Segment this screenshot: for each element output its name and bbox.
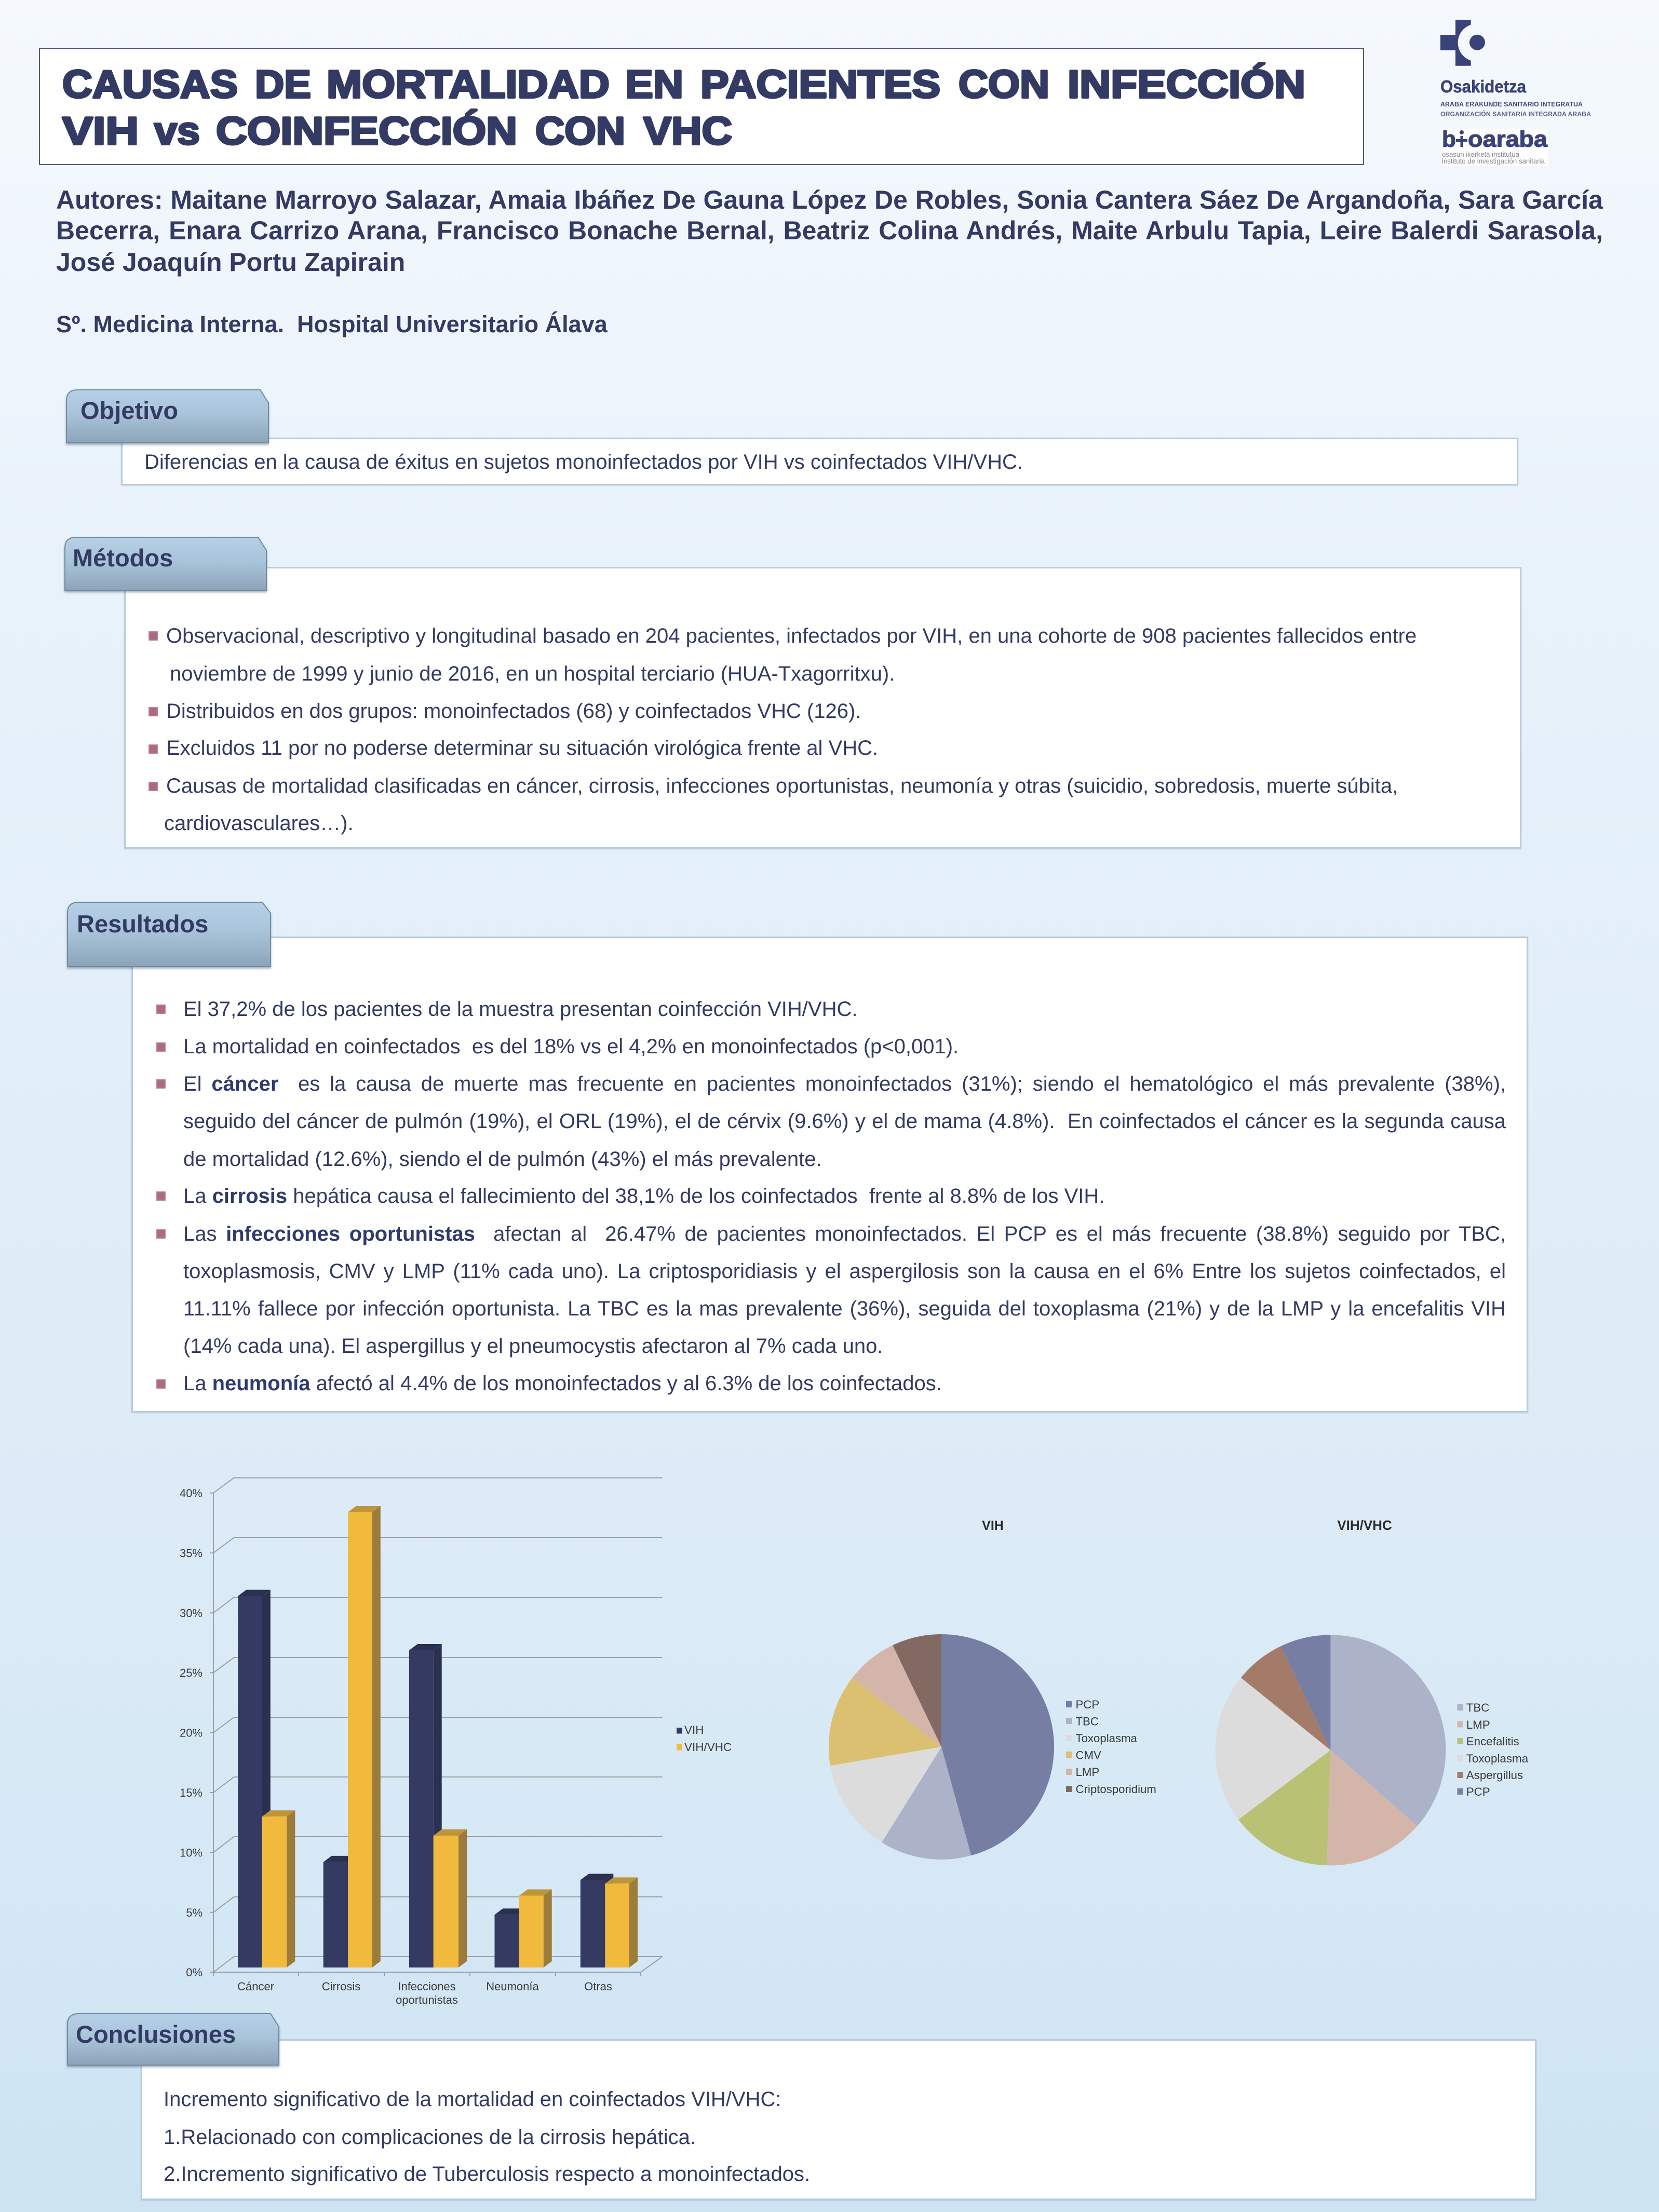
legend: VIH pie [1066,1698,1156,1796]
title box: VHC [643,109,732,153]
text: results list: La cirrosis hepática causa el fallecimiento del 38,1% de los coinfectados frente al 8.8% de los VIH. [183,1185,1104,1207]
legend: VIH pie: Toxoplasma [1076,1732,1138,1745]
bars: Otras [581,1874,638,1967]
legend: VIH pie: CMV [1076,1748,1101,1762]
legend: VIH/VHC pie: TBC [1466,1701,1489,1714]
panel: objetivo [64,389,1519,486]
panel: conclusiones [65,2013,1537,2201]
text: methods list: Observacional, descriptivo y longitudinal basado en 204 pacientes, infectados por VIH, en una cohorte de 908 pacientes fallecidos entre [166,625,1417,647]
title box: vs [154,109,200,153]
y axis labels: 20% [180,1727,203,1740]
bars: Cáncer [238,1590,295,1967]
x axis labels: Neumonía [486,1980,539,1993]
legend: VIH pie: Criptosporidium [1076,1783,1156,1796]
authors: Autores: Maitane Marroyo Salazar, Amaia Ibáñez De Gauna López De Robles, Sonia Cantera Sáez De Argandoña, Sara García [56,185,1603,214]
authors [56,185,1603,277]
title box: VIH [62,109,139,153]
title box: PACIENTES [700,62,940,106]
logos: Osakidetza and bioaraba: oaraba [1468,127,1548,152]
title box: INFECCIÓN [1068,62,1305,106]
text: methods list: Causas de mortalidad clasificadas en cáncer, cirrosis, infecciones oportunistas, neumonía y otras (suicidio, sobredosis, muerte súbita, [166,775,1398,797]
text: results list: El 37,2% de los pacientes de la muestra presentan coinfección VIH/VHC. [183,998,857,1021]
logos: Osakidetza and bioaraba: ARABA ERAKUNDE SANITARIO INTEGRATUA [1440,101,1583,108]
y axis labels: 40% [180,1487,203,1500]
text: results list: Las infecciones oportunistas afectan al 26.47% de pacientes monoinfectados. El PCP es el más frecuente (38.8%) seguido por TBC, [183,1223,1506,1245]
y axis labels: 15% [180,1786,203,1799]
text: conclusions: 2.Incremento significativo de Tuberculosis respecto a monoinfectados. [164,2163,810,2186]
text: methods list: Distribuidos en dos grupos: monoinfectados (68) y coinfectados VHC (126). [166,700,861,723]
heading: Conclusiones: Conclusiones [76,2020,236,2048]
legend: VIH pie: TBC [1076,1715,1099,1728]
text: objective: Diferencias en la causa de éxitus en sujetos monoinfectados por VIH vs coinfectados VIH/VHC. [144,451,1023,473]
title box: CON [535,109,625,153]
text: methods list: Excluidos 11 por no poderse determinar su situación virológica frente al VHC. [166,737,878,759]
text: results list: 11.11% fallece por infección oportunista. La TBC es la mas prevalente (36%), seguida del toxoplasma (21%) y de la LMP y la encefalitis VIH [183,1297,1506,1320]
text: results list: (14% cada una). El aspergillus y el pneumocystis afectaron al 7% cada uno. [183,1335,883,1358]
legend: VIH/VHC pie: LMP [1466,1718,1490,1731]
title box [39,48,1364,165]
y axis labels: 0% [186,1966,203,1979]
text: methods list: noviembre de 1999 y junio de 2016, en un hospital terciario (HUA-Txagorritxu). [170,662,895,685]
text: results list: toxoplasmosis, CMV y LMP (11% cada uno). La criptosporidiasis y el aspergilosis son la causa en el 6% Entre los sujetos coinfectados, el [183,1260,1506,1283]
bars: Neumonía [494,1890,552,1967]
y axis labels: 25% [180,1666,203,1679]
authors: José Joaquín Portu Zapirain [56,248,405,277]
heading: Objetivo: Objetivo [80,397,178,424]
logos: Osakidetza and bioaraba [1440,20,1591,166]
x axis labels: Cáncer [237,1980,274,1993]
heading: Resultados [65,902,272,970]
x axis labels: Otras [584,1980,612,1993]
text: conclusions: Incremento significativo de la mortalidad en coinfectados VIH/VHC: [164,2088,781,2111]
pie chart: VIH: VIH [982,1518,1004,1533]
legend: VIH/VHC pie: Aspergillus [1466,1769,1523,1782]
legend: VIH pie: LMP [1076,1766,1099,1779]
title box: CON [959,62,1049,106]
heading: Conclusiones [65,2013,280,2068]
text: methods list: cardiovasculares…). [164,812,354,835]
title box: DE [255,62,311,106]
text: results list: La neumonía afectó al 4.4% de los monoinfectados y al 6.3% de los coinfectados. [183,1372,942,1395]
pie chart: VIH/VHC: VIH/VHC [1337,1517,1392,1533]
title box: COINFECCIÓN [216,109,517,153]
text: results list: seguido del cáncer de pulmón (19%), el ORL (19%), el de cérvix (9.6%) y el de mama (4.8%). En coinfectados el cáncer es la segunda causa [183,1110,1506,1133]
x axis labels: oportunistas [396,1993,458,2006]
text: results list: El cáncer es la causa de muerte mas frecuente en pacientes monoinfectados (31%); siendo el hematológico el más prevalente (38%), [183,1073,1506,1095]
text: methods list [149,625,1417,835]
legend: VIH/VHC [684,1741,732,1754]
heading: Resultados: Resultados [77,910,208,938]
heading: Métodos [63,537,268,594]
bars: Infecciones oportunistas [409,1644,467,1967]
logos: Osakidetza and bioaraba: ORGANIZACIÓN SANITARIA INTEGRADA ARABA [1440,110,1591,118]
title box: MORTALIDAD [327,62,610,106]
legend: VIH/VHC pie: PCP [1466,1785,1490,1798]
legend: VIH pie: PCP [1076,1698,1099,1711]
text: results list: La mortalidad en coinfectados es del 18% vs el 4,2% en monoinfectados (p<0,001). [183,1035,959,1058]
heading: Métodos: Métodos [73,544,173,572]
logos: Osakidetza and bioaraba: instituto de investigación sanitaria [1442,157,1545,165]
text: results list [156,998,1506,1395]
panel: métodos [63,537,1522,850]
x axis labels: Infecciones [398,1980,456,1993]
title box: EN [625,62,683,106]
text: conclusions [164,2088,810,2186]
text: results list: de mortalidad (12.6%), siendo el de pulmón (43%) el más prevalente. [183,1148,822,1171]
logos: Osakidetza and bioaraba: osasun ikerketa institutua [1442,151,1519,158]
x axis labels: Cirrosis [322,1980,360,1993]
panel: resultados [65,902,1529,1413]
text: conclusions: 1.Relacionado con complicaciones de la cirrosis hepática. [164,2126,696,2149]
legend: VIH [684,1724,704,1736]
y axis labels: 10% [180,1846,203,1859]
logos: Osakidetza and bioaraba: b [1442,127,1456,152]
legend [677,1724,732,1754]
pie chart: VIH/VHC [1215,1517,1529,1866]
y axis labels: 35% [180,1546,203,1559]
y axis labels: 30% [180,1607,203,1620]
title box: CAUSAS [62,62,238,106]
heading: Objetivo [64,389,270,446]
pie chart: VIH [829,1518,1156,1860]
legend: VIH/VHC pie: Encefalitis [1466,1735,1519,1748]
legend: VIH/VHC pie [1457,1701,1529,1798]
authors: Becerra, Enara Carrizo Arana, Francisco Bonache Bernal, Beatriz Colina Andrés, Maite Arbulu Tapia, Leire Balerdi Sarasola, [56,216,1603,245]
bar chart: causes of death by group [180,1477,732,2006]
x axis labels [237,1980,612,2006]
y axis labels: 5% [186,1906,203,1919]
bars: Cirrosis [323,1506,381,1967]
affiliation: Sº. Medicina Interna. Hospital Universitario Álava [56,311,608,337]
logos: Osakidetza and bioaraba: Osakidetza [1440,77,1527,96]
y axis labels [180,1487,203,1979]
legend: VIH/VHC pie: Toxoplasma [1466,1752,1529,1765]
